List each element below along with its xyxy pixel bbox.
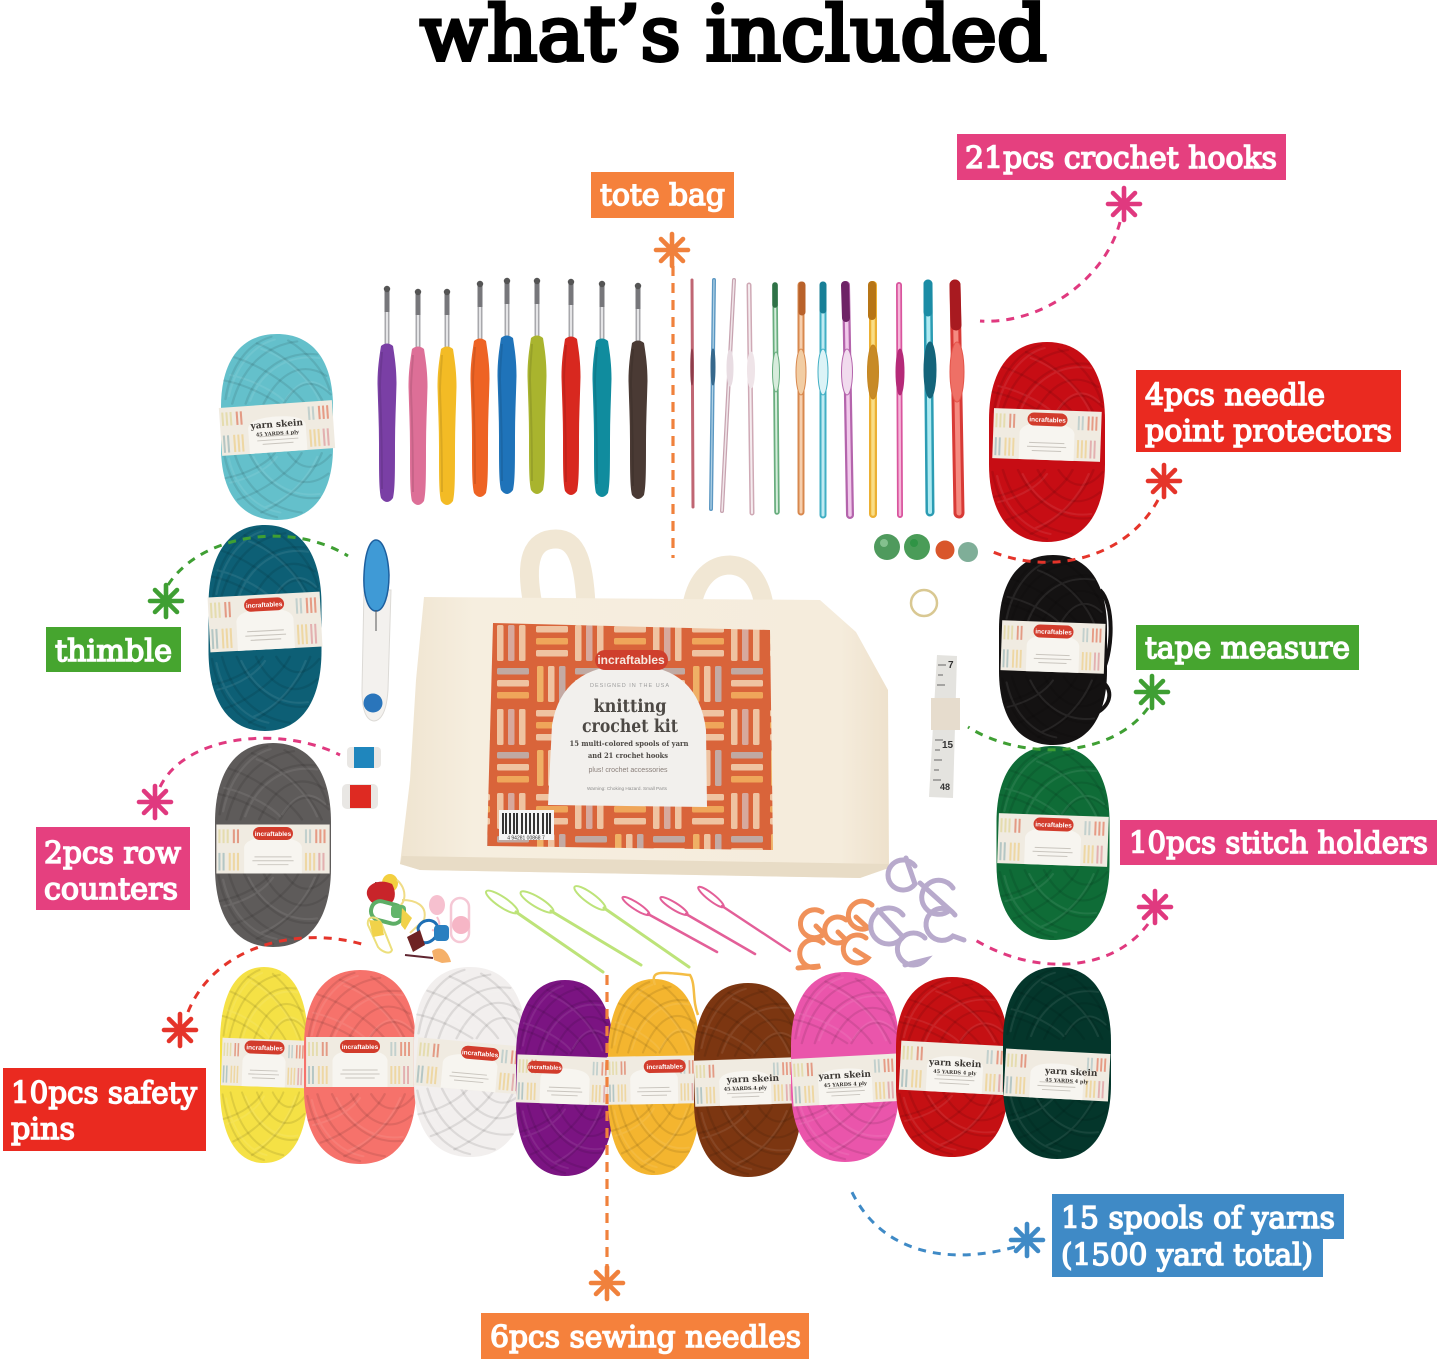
label: tote bag xyxy=(591,172,734,218)
icon: stitch holders xyxy=(798,858,964,968)
icon: tape measure: 15 xyxy=(942,740,954,751)
connector: point protectors xyxy=(993,500,1158,562)
connector: thimble xyxy=(168,536,348,585)
label: 10pcs safety pins: 10pcs safety xyxy=(11,1076,197,1111)
asterisk: crochet hooks xyxy=(1108,188,1140,220)
skein: dark green: 45 YARDS 4 ply xyxy=(1045,1077,1089,1086)
icon: thread snips xyxy=(362,540,391,721)
label: 2pcs row counters xyxy=(36,827,190,910)
label: 15 spools of yarns xyxy=(1052,1194,1344,1277)
skein: pink: 45 YARDS 4 ply xyxy=(824,1081,868,1089)
skein: brown: yarn skein xyxy=(726,1074,780,1086)
connector: stitch holders xyxy=(972,924,1148,964)
card text: knitting xyxy=(594,697,666,717)
skein: purple: incraftables xyxy=(528,1065,562,1072)
icon: sewing needles xyxy=(483,883,790,972)
asterisk: point protectors xyxy=(1148,465,1180,497)
label: tape measure: tape measure xyxy=(1145,631,1350,666)
card text: plus! crochet accessories xyxy=(588,767,668,774)
icon: thimble xyxy=(911,590,937,616)
skein: salmon: incraftables xyxy=(342,1044,379,1051)
yarn skein: teal xyxy=(208,525,322,731)
asterisk: thimble xyxy=(150,585,182,617)
label: 2pcs row counters: 2pcs row xyxy=(44,836,181,871)
card text: Warning: Choking Hazard. Small Parts xyxy=(587,786,668,791)
aluminium crochet hooks xyxy=(691,280,964,515)
icon: tape measure: 7 xyxy=(948,660,954,671)
orange holders xyxy=(798,901,872,968)
label: 15 spools of yarns: (1500 yard total) xyxy=(1061,1238,1313,1273)
skein: brown: 45 YARDS 4 ply xyxy=(724,1085,768,1093)
skein: pink xyxy=(791,972,899,1162)
yarn skein: gray: incraftables xyxy=(255,831,292,838)
asterisk: tote bag xyxy=(656,234,688,266)
asterisk: stitch holders xyxy=(1139,891,1171,923)
pink needles xyxy=(621,884,790,954)
white arch label xyxy=(548,665,707,807)
barcode xyxy=(499,810,554,842)
icon: needle point protectors xyxy=(874,534,978,562)
asterisk: yarn spools xyxy=(1011,1224,1043,1256)
skein: white: incraftables xyxy=(462,1049,499,1059)
skein: salmon xyxy=(304,970,416,1164)
skein: dark red: yarn skein xyxy=(928,1058,982,1070)
tote bag xyxy=(400,539,889,878)
tote body xyxy=(400,597,889,878)
ergonomic crochet hooks xyxy=(378,278,648,505)
yarn skein: light blue: 45 YARDS 4 ply xyxy=(256,429,300,438)
skein: purple xyxy=(516,980,614,1176)
label: 2pcs row counters: counters xyxy=(44,872,178,907)
yarn row: bottom skeins xyxy=(220,967,1111,1177)
label: 4pcs needle point protectors xyxy=(1136,370,1401,452)
asterisk: sewing needles xyxy=(591,1267,623,1299)
skein: amber: incraftables xyxy=(646,1063,683,1071)
yarn skein: light blue xyxy=(219,334,335,520)
card text xyxy=(570,683,689,791)
asterisk: row counters xyxy=(139,786,171,818)
skein: dark green: yarn skein xyxy=(1044,1066,1098,1079)
icon: tape measure xyxy=(929,655,960,798)
yarn skein: gray xyxy=(215,743,331,947)
card text: and 21 crochet hooks xyxy=(588,751,668,760)
connector: safety pins xyxy=(188,938,365,1012)
icon: safety pins xyxy=(367,874,470,963)
barcode: 4 94281 00868 7 xyxy=(507,836,545,842)
label: 21pcs crochet hooks: 21pcs crochet hooks xyxy=(965,141,1277,176)
kit card xyxy=(487,623,773,850)
skein: yellow xyxy=(220,967,308,1163)
yarn skein: red xyxy=(989,342,1105,542)
label: 15 spools of yarns: 15 spools of yarns xyxy=(1061,1201,1335,1236)
skein: dark red xyxy=(896,977,1011,1157)
connector: row counters xyxy=(160,738,340,787)
skein: brown xyxy=(694,983,802,1177)
icon: tape measure: 48 xyxy=(940,782,950,792)
skein: dark green xyxy=(1003,967,1111,1159)
connector: tote bag xyxy=(671,266,675,558)
skein: pink: yarn skein xyxy=(817,1070,872,1082)
skein: dark red: 45 YARDS 4 ply xyxy=(933,1069,978,1077)
yarn skein: red: incraftables xyxy=(1029,416,1066,425)
label: 6pcs sewing needles: 6pcs sewing needles xyxy=(490,1320,801,1355)
yarn skein: light blue: yarn skein xyxy=(249,418,304,432)
connector: sewing needles xyxy=(605,975,609,1268)
yarn skein: green xyxy=(996,746,1110,940)
yarn skein: black xyxy=(999,555,1111,745)
asterisk: tape measure xyxy=(1136,676,1168,708)
brand pill xyxy=(595,650,668,670)
green needles xyxy=(483,883,689,972)
yarn skein: green: incraftables xyxy=(1035,821,1072,830)
asterisk: safety pins xyxy=(164,1014,196,1046)
yarn skein: teal: incraftables xyxy=(246,601,283,610)
label: thimble: thimble xyxy=(55,634,172,669)
card text: crochet kit xyxy=(582,717,678,737)
label: thimble xyxy=(46,627,181,672)
connector: crochet hooks xyxy=(980,222,1120,321)
icon: row counters xyxy=(342,747,381,809)
card text: 15 multi-colored spools of yarn xyxy=(570,739,689,748)
connector: yarn spools xyxy=(850,1188,1015,1255)
skein: yellow: incraftables xyxy=(246,1044,283,1053)
label: 10pcs safety pins xyxy=(3,1068,206,1151)
card text: DESIGNED IN THE USA xyxy=(590,683,670,689)
skein: white xyxy=(414,967,526,1157)
skein: amber xyxy=(607,973,701,1175)
label: tote bag: tote bag xyxy=(600,178,725,213)
label: 4pcs needle point protectors: point protectors xyxy=(1145,414,1392,449)
label: 10pcs stitch holders: 10pcs stitch holders xyxy=(1129,826,1428,861)
connector: tape measure xyxy=(968,708,1148,750)
tote handles xyxy=(529,539,764,605)
brand pill: incraftables xyxy=(597,653,665,667)
label: 10pcs safety pins: pins xyxy=(11,1112,75,1147)
yarn skein: black: incraftables xyxy=(1035,628,1072,637)
label: 4pcs needle point protectors: 4pcs needle xyxy=(1145,378,1325,413)
purple holders xyxy=(871,858,964,965)
